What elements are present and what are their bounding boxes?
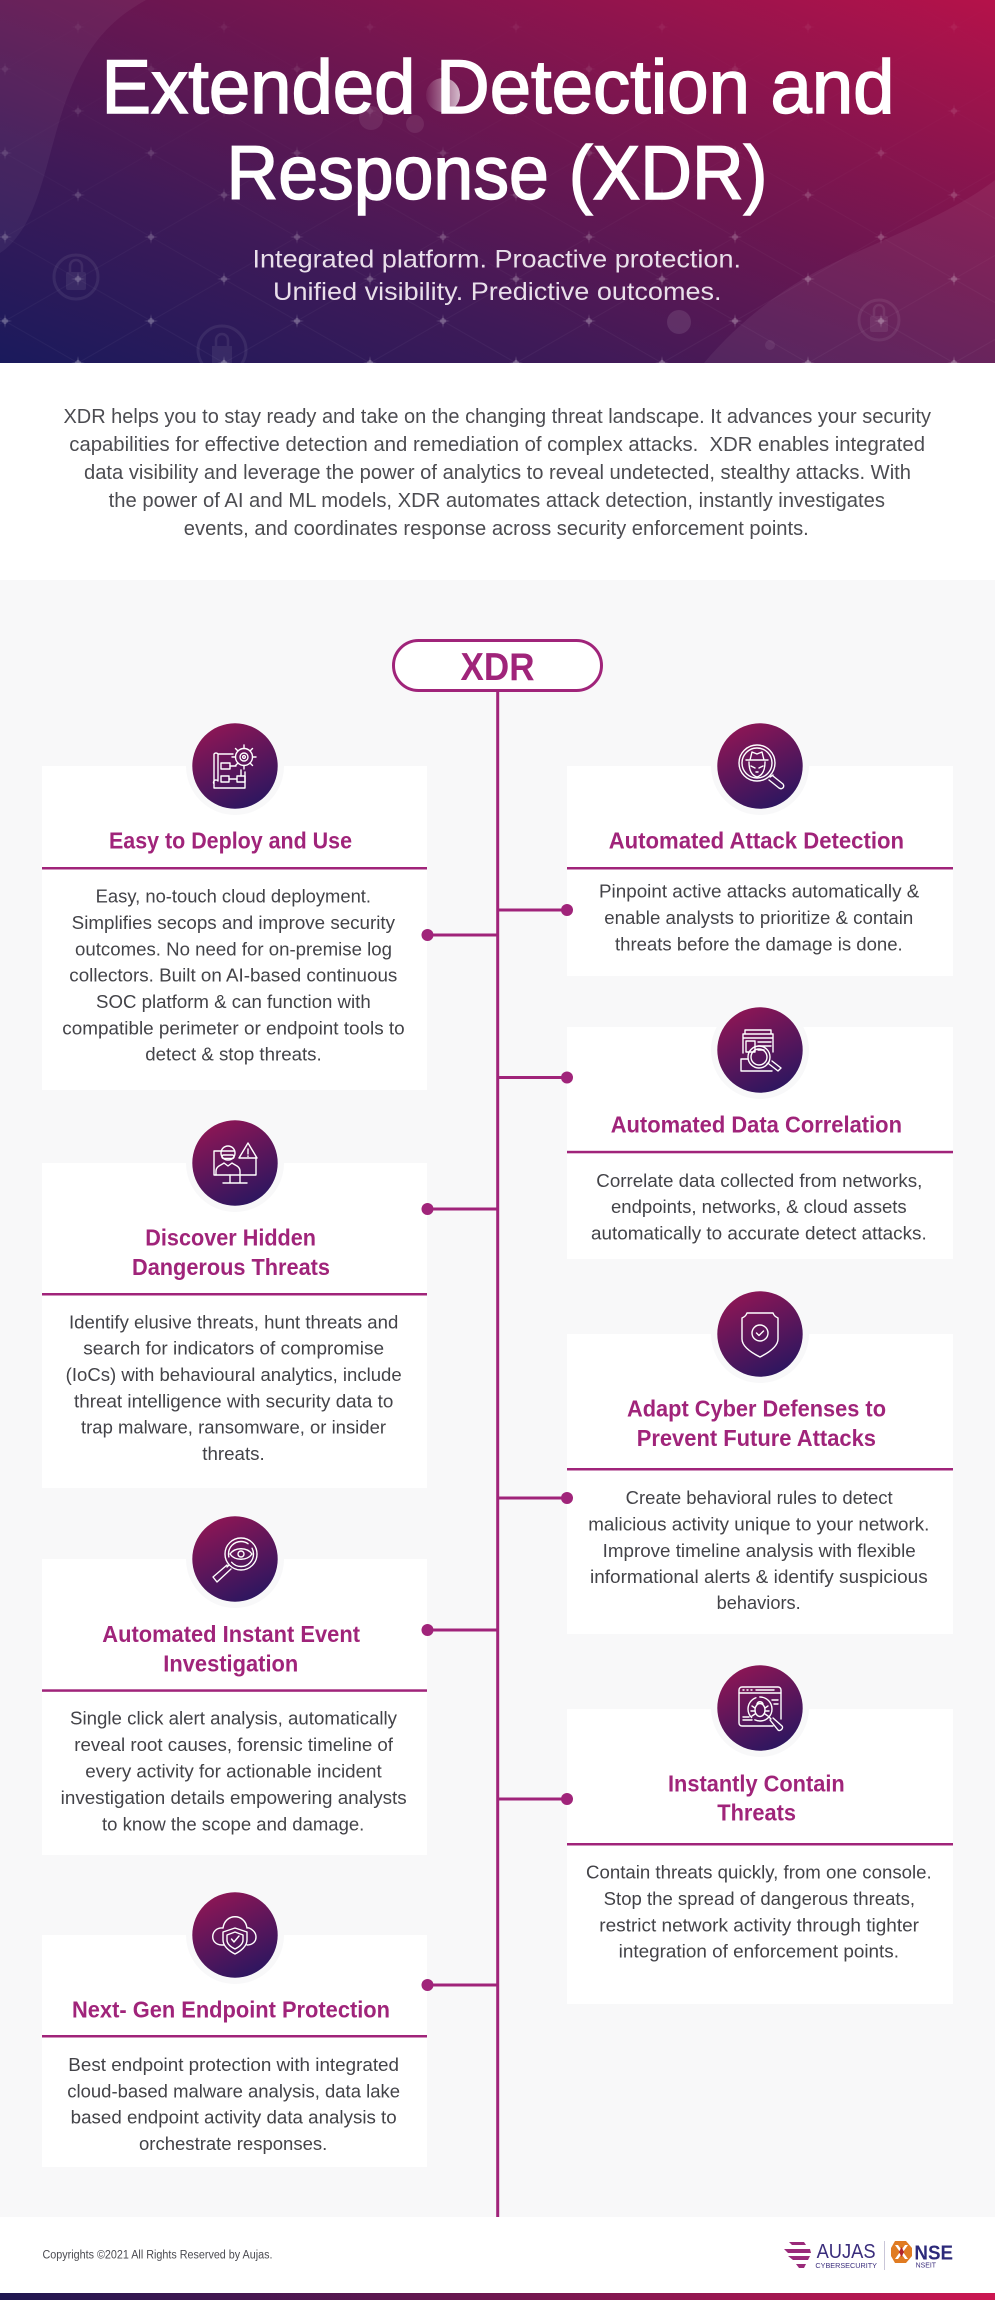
icon: hacker on monitor with warning bbox=[192, 1120, 278, 1206]
copyright: Copyrights ©2021 All Rights Reserved by Aujas. bbox=[42, 2250, 272, 2262]
panel: automated data correlation bbox=[567, 1001, 953, 1259]
body text bbox=[599, 882, 919, 954]
body text: investigation details empowering analysts bbox=[61, 1788, 407, 1808]
body text bbox=[591, 1171, 927, 1243]
body text: Single click alert analysis, automatically bbox=[70, 1709, 397, 1729]
body text: endpoints, networks, & cloud assets bbox=[611, 1197, 907, 1217]
body text: Best endpoint protection with integrated bbox=[68, 2055, 399, 2075]
body text: informational alerts & identify suspicious bbox=[590, 1567, 928, 1587]
icon: eye in magnifier bbox=[192, 1516, 278, 1602]
body text: every activity for actionable incident bbox=[85, 1761, 382, 1781]
intro paragraph: XDR helps you to stay ready and take on the changing threat landscape. It advances your security bbox=[64, 406, 931, 428]
body text bbox=[61, 1709, 407, 1834]
body text: Contain threats quickly, from one console. bbox=[586, 1862, 932, 1882]
icon: document with magnifier bbox=[717, 1007, 803, 1093]
body text: cloud-based malware analysis, data lake bbox=[67, 2081, 400, 2101]
panel: easy to deploy and use bbox=[42, 717, 427, 1090]
heading bbox=[627, 1396, 886, 1451]
header banner bbox=[0, 0, 995, 374]
body text bbox=[62, 887, 405, 1065]
subtitle: Integrated platform. Proactive protection. bbox=[252, 246, 741, 274]
logo: Aujas bbox=[784, 2241, 877, 2270]
body text: SOC platform & can function with bbox=[96, 992, 371, 1012]
body text: detect & stop threats. bbox=[145, 1045, 322, 1065]
logo: NSE bbox=[891, 2241, 953, 2270]
body text: reveal root causes, forensic timeline of bbox=[74, 1735, 394, 1755]
heading: Automated Instant Event bbox=[102, 1621, 360, 1647]
body text: threat intelligence with security data to bbox=[74, 1391, 393, 1411]
body text bbox=[586, 1862, 932, 1962]
icon: shield with check bbox=[717, 1291, 803, 1377]
panel: instantly contain threats bbox=[567, 1659, 953, 2004]
intro paragraph: the power of AI and ML models, XDR automates attack detection, instantly investigates bbox=[109, 490, 885, 512]
body text: threats before the damage is done. bbox=[615, 934, 903, 954]
body text: Simplifies secops and improve security bbox=[72, 913, 395, 933]
icon: cloud with shield bbox=[192, 1892, 278, 1978]
logo: NSE: NSEIT bbox=[916, 2260, 936, 2270]
timeline section background bbox=[0, 580, 995, 2217]
panel: automated instant event investigation bbox=[42, 1510, 427, 1855]
heading: Discover Hidden bbox=[145, 1225, 316, 1251]
panel: next-gen endpoint protection bbox=[42, 1886, 427, 2167]
body text: compatible perimeter or endpoint tools to bbox=[62, 1018, 405, 1038]
icon: blueprint and gear bbox=[192, 723, 278, 809]
logo: Aujas: AUJAS bbox=[817, 2241, 876, 2263]
intro paragraph: capabilities for effective detection and remediation of complex attacks. XDR enables integrated bbox=[69, 434, 925, 456]
body text: Pinpoint active attacks automatically & bbox=[599, 882, 919, 902]
body text: Stop the spread of dangerous threats, bbox=[604, 1889, 915, 1909]
body text: based endpoint activity data analysis to bbox=[71, 2108, 397, 2128]
heading: Automated Data Correlation bbox=[611, 1112, 902, 1138]
body text: collectors. Built on AI-based continuous bbox=[69, 966, 397, 986]
heading: Adapt Cyber Defenses to bbox=[627, 1396, 886, 1422]
body text: outcomes. No need for on-premise log bbox=[75, 939, 392, 959]
body text: Create behavioral rules to detect bbox=[626, 1488, 893, 1508]
heading bbox=[132, 1225, 330, 1280]
body text: search for indicators of compromise bbox=[83, 1339, 384, 1359]
body text: orchestrate responses. bbox=[139, 2134, 327, 2154]
body text bbox=[588, 1488, 929, 1613]
heading: Prevent Future Attacks bbox=[637, 1425, 876, 1451]
heading: Investigation bbox=[163, 1651, 298, 1677]
heading bbox=[668, 1770, 845, 1826]
heading: Threats bbox=[717, 1800, 796, 1826]
panel: adapt cyber defenses bbox=[567, 1285, 953, 1634]
intro paragraph bbox=[64, 406, 931, 540]
body text bbox=[66, 1312, 402, 1464]
body text: behaviors. bbox=[717, 1593, 801, 1613]
heading bbox=[102, 1621, 360, 1677]
body text: Improve timeline analysis with flexible bbox=[603, 1541, 916, 1561]
heading: Instantly Contain bbox=[668, 1770, 845, 1796]
body text: Correlate data collected from networks, bbox=[596, 1171, 922, 1191]
body text: enable analysts to prioritize & contain bbox=[604, 908, 913, 928]
title: Response (XDR) bbox=[226, 131, 768, 216]
body text: Identify elusive threats, hunt threats and bbox=[69, 1312, 398, 1332]
title bbox=[102, 45, 894, 216]
XDR pill: XDR bbox=[460, 646, 534, 689]
body text: to know the scope and damage. bbox=[102, 1814, 364, 1834]
body text: malicious activity unique to your network. bbox=[588, 1514, 929, 1534]
heading: Next- Gen Endpoint Protection bbox=[72, 1996, 390, 2022]
bottom gradient bar bbox=[0, 2293, 995, 2300]
body text: Easy, no-touch cloud deployment. bbox=[96, 887, 371, 907]
body text: threats. bbox=[202, 1444, 265, 1464]
subtitle bbox=[252, 246, 741, 306]
intro paragraph: events, and coordinates response across security enforcement points. bbox=[184, 518, 809, 540]
body text: integration of enforcement points. bbox=[619, 1942, 899, 1962]
panel: automated attack detection bbox=[567, 717, 953, 976]
intro paragraph: data visibility and leverage the power of analytics to reveal undetected, stealthy attacks. With bbox=[84, 462, 911, 484]
icon: spy in magnifier bbox=[717, 723, 803, 809]
heading: Dangerous Threats bbox=[132, 1254, 330, 1280]
panel: discover hidden dangerous threats bbox=[42, 1114, 427, 1488]
heading: Easy to Deploy and Use bbox=[109, 828, 352, 854]
body text bbox=[67, 2055, 400, 2154]
subtitle: Unified visibility. Predictive outcomes. bbox=[273, 278, 722, 306]
heading: Automated Attack Detection bbox=[609, 828, 904, 854]
title: Extended Detection and bbox=[102, 45, 894, 130]
timeline spine and connectors bbox=[422, 691, 573, 2217]
logo: Aujas: CYBERSECURITY bbox=[815, 2261, 877, 2270]
body text: automatically to accurate detect attacks. bbox=[591, 1223, 927, 1243]
body text: (IoCs) with behavioural analytics, include bbox=[66, 1365, 402, 1385]
logo: NSE: NSE bbox=[914, 2242, 953, 2264]
icon: bug in browser window bbox=[717, 1665, 803, 1751]
XDR pill bbox=[394, 640, 602, 690]
body text: restrict network activity through tighter bbox=[599, 1915, 919, 1935]
body text: trap malware, ransomware, or insider bbox=[81, 1418, 386, 1438]
